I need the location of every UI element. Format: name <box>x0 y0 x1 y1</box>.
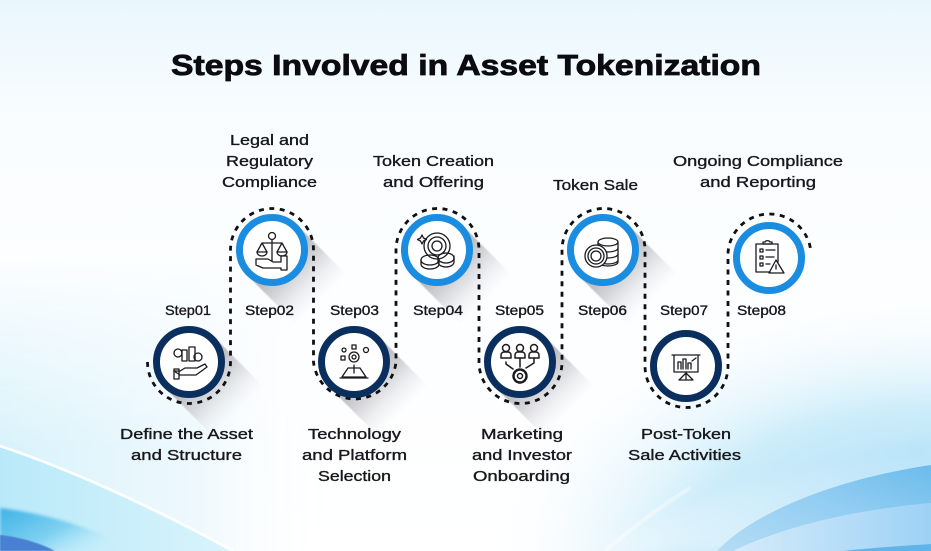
step 2 text: Compliance <box>222 174 317 191</box>
icon: technology platform <box>340 345 368 378</box>
step 7 text: Sale Activities <box>628 447 741 464</box>
step 8 text: Ongoing Compliance <box>673 153 843 170</box>
step 6 label: Step06 <box>578 302 627 318</box>
step 3 label: Step03 <box>330 302 379 318</box>
step 5 text: Marketing <box>481 426 563 443</box>
step 6 <box>553 177 638 318</box>
step 3 <box>302 302 407 485</box>
step 7 text: Post-Token <box>641 426 731 443</box>
step 2 text <box>222 132 317 191</box>
step 2 circle <box>240 218 304 282</box>
step 2 <box>222 132 317 318</box>
step 6 circle <box>570 218 636 282</box>
step 1 text: Define the Asset <box>120 426 254 443</box>
step 8 text <box>673 153 843 191</box>
step 4 circle <box>404 218 470 282</box>
step 7 text <box>628 426 741 464</box>
step 7 circle <box>654 334 718 398</box>
step 6 text: Token Sale <box>553 177 638 194</box>
step 5 text: and Investor <box>472 447 572 464</box>
icon: hand with asset <box>174 347 207 379</box>
step 3 text: Technology <box>308 426 402 443</box>
icon: presentation board <box>672 355 700 380</box>
step 4 label: Step04 <box>413 302 463 318</box>
step 5 text <box>472 426 572 485</box>
dashed connector path <box>148 208 811 408</box>
step 4 text <box>373 153 494 191</box>
step 1 circle <box>156 330 222 394</box>
icon: scales and hand <box>256 232 287 270</box>
step 5 circle <box>488 330 552 394</box>
step 1 text <box>120 426 254 464</box>
step 3 circle <box>322 330 386 394</box>
step 7 label: Step07 <box>660 302 708 318</box>
title: Steps Involved in Asset Tokenization <box>171 50 761 82</box>
step 4 text: Token Creation <box>373 153 494 170</box>
step 8 label: Step08 <box>737 302 786 318</box>
step 8 circle <box>736 226 802 290</box>
step 5 <box>472 302 572 485</box>
step 1 text: and Structure <box>131 447 242 464</box>
icon: token coins <box>418 233 454 269</box>
step 7 <box>628 302 741 464</box>
step 4 <box>373 153 494 318</box>
icon: investors and gear <box>501 344 539 382</box>
step 2 text: Regulatory <box>226 153 314 170</box>
step 2 text: Legal and <box>230 132 309 149</box>
step 3 text: Selection <box>318 468 391 485</box>
circle shadows <box>164 225 678 437</box>
step 4 text: and Offering <box>383 174 484 191</box>
step 5 text: Onboarding <box>473 468 570 485</box>
step 1 label: Step01 <box>165 302 211 318</box>
icon: clipboard with warning <box>756 241 784 273</box>
step 8 <box>673 153 843 318</box>
step 3 text: and Platform <box>302 447 407 464</box>
step 3 text <box>302 426 407 485</box>
step 1 <box>120 302 254 464</box>
step 2 label: Step02 <box>245 302 294 318</box>
icon: coin stack <box>585 238 618 267</box>
step 5 label: Step05 <box>495 302 544 318</box>
step 8 text: and Reporting <box>700 174 816 191</box>
